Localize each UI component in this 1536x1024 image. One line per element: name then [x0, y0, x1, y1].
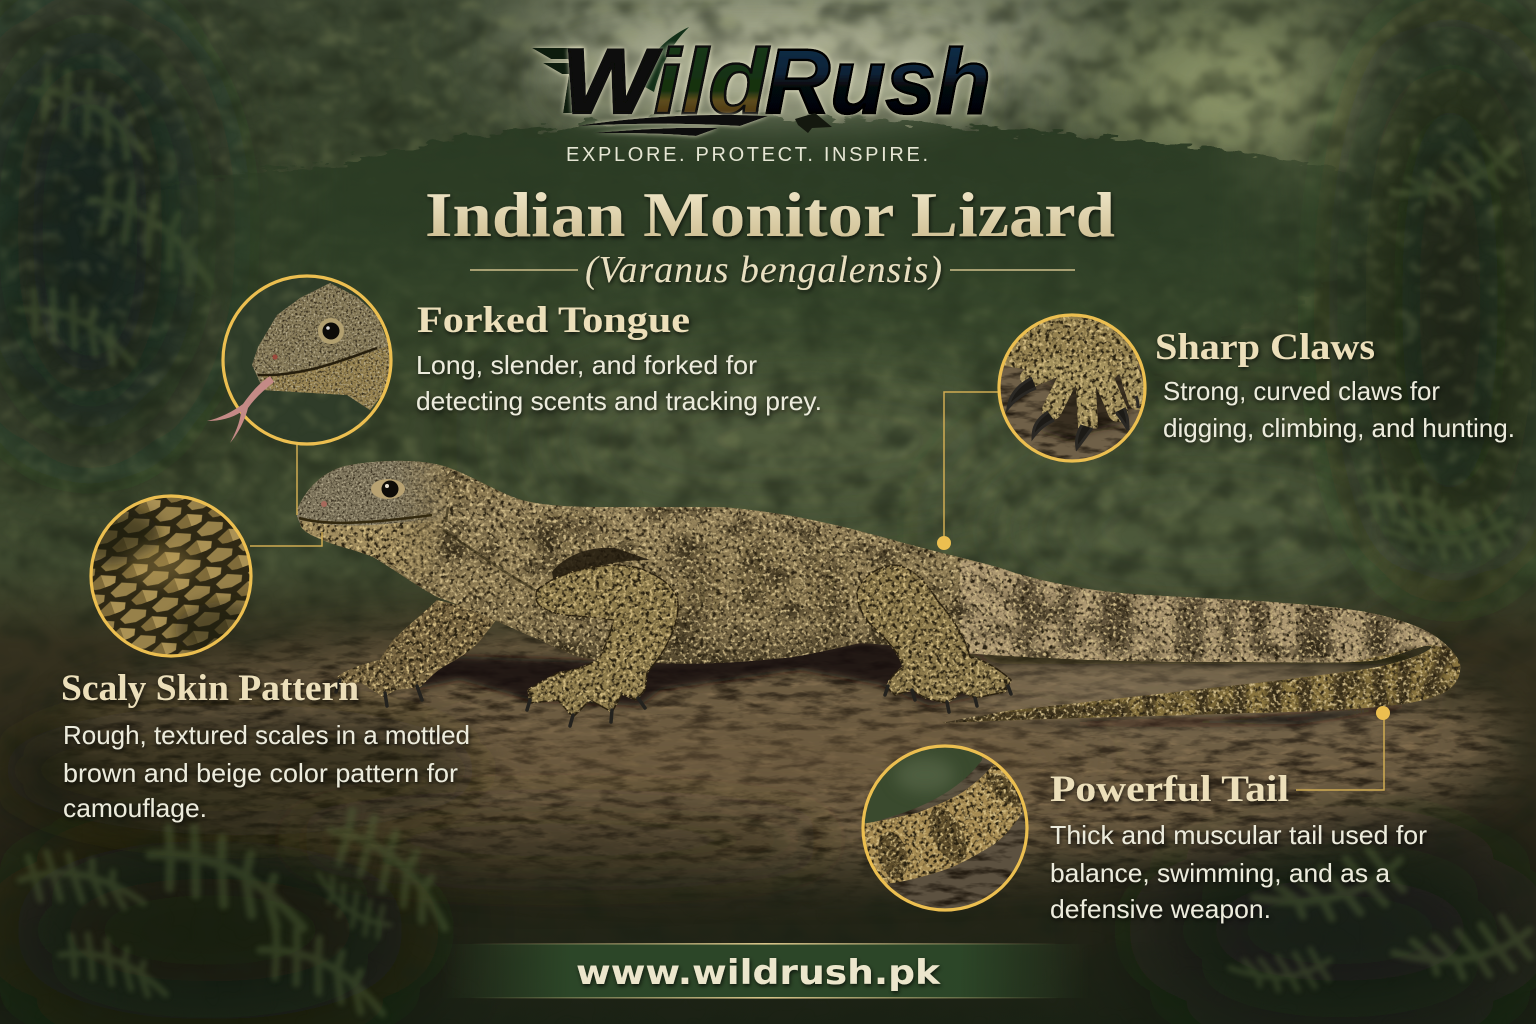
description: digging, climbing, and hunting. [1163, 413, 1515, 443]
near front leg [528, 565, 678, 717]
logo eagle [795, 113, 832, 133]
head [297, 461, 452, 529]
ground shadow [410, 640, 1440, 726]
logo swoosh on W [636, 27, 689, 92]
wordmark second part: Rush [765, 31, 991, 133]
lower tail bands [940, 650, 1448, 724]
icon: tail segment [860, 745, 1030, 915]
jawline [299, 515, 432, 523]
description: brown and beige color pattern for [63, 758, 458, 788]
far front leg [337, 600, 500, 697]
eye [371, 479, 405, 499]
lizard illustration [297, 461, 1460, 726]
body bands [510, 518, 844, 630]
nostril [321, 501, 327, 507]
body and tail [297, 461, 1460, 726]
logo backlight [555, 48, 975, 112]
description [1050, 820, 1427, 924]
leader lines [250, 392, 1390, 790]
tongue [207, 376, 274, 443]
body shading [430, 500, 990, 670]
description [1163, 376, 1515, 443]
subtitle: (Varanus bengalensis) [585, 249, 942, 291]
tagline: EXPLORE. PROTECT. INSPIRE. [566, 144, 928, 166]
callout: forked tongue [207, 270, 822, 450]
heading: Forked Tongue [417, 300, 690, 341]
logo [532, 27, 991, 136]
description: defensive weapon. [1050, 894, 1271, 924]
description [416, 350, 822, 416]
heading: Powerful Tail [1050, 769, 1289, 810]
footer banner [440, 943, 1090, 999]
heading: Sharp Claws [1155, 327, 1375, 368]
title: Indian Monitor Lizard [425, 179, 1115, 250]
callout: sharp claws [995, 312, 1515, 467]
logo swoosh underline [576, 115, 768, 136]
description: camouflage. [63, 793, 207, 823]
description: Long, slender, and forked for [416, 350, 757, 380]
description: balance, swimming, and as a [1050, 858, 1391, 888]
lower jaw [300, 516, 444, 580]
icon: skin scales [50, 496, 275, 658]
claws [336, 680, 1011, 726]
upper tail bands [1018, 578, 1384, 660]
description: detecting scents and tracking prey. [416, 386, 822, 416]
ground [20, 617, 1528, 894]
icon: lizard head [207, 270, 395, 450]
description: Thick and muscular tail used for [1050, 820, 1427, 850]
shoulder shadow [552, 548, 650, 590]
description: Strong, curved claws for [1163, 376, 1440, 406]
website url: www.wildrush.pk [576, 953, 942, 993]
lower tail tone [940, 645, 1460, 726]
heading: Scaly Skin Pattern [61, 668, 359, 709]
description: Rough, textured scales in a mottled [63, 720, 470, 750]
description [63, 720, 470, 823]
icon: clawed foot [995, 312, 1150, 467]
brush band behind title [246, 110, 1336, 348]
wordmark: Wild [562, 31, 770, 133]
logo wing stripes [532, 48, 584, 113]
callout: powerful tail [860, 745, 1427, 924]
near hind leg [857, 565, 1011, 703]
callout: scaly skin pattern [50, 496, 470, 823]
upper tail tone [960, 560, 1440, 665]
neck fold [443, 507, 535, 590]
